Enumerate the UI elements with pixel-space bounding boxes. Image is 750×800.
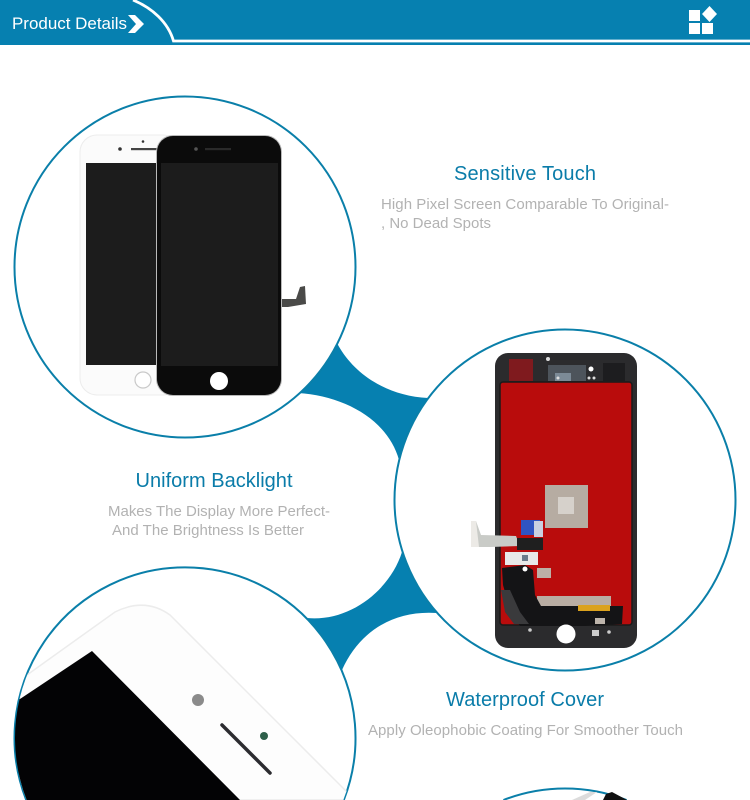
text block: Uniform Backlight	[108, 470, 330, 539]
home button	[556, 624, 576, 644]
yellow tape	[578, 605, 610, 611]
text block: Uniform Backlight: Uniform Backlight	[136, 470, 293, 492]
panel: red back of display circle	[394, 330, 736, 670]
silver sticker	[545, 485, 588, 528]
text block: Sensitive Touch: Sensitive Touch	[454, 163, 596, 185]
icon: grid squares	[689, 6, 717, 34]
sensor	[260, 732, 268, 740]
text block: Uniform Backlight: Makes The Display More Perfect-	[108, 503, 330, 520]
white phone	[80, 134, 168, 396]
text block: Sensitive Touch	[381, 163, 669, 232]
white phone body	[20, 605, 355, 800]
white label	[505, 552, 538, 565]
text block: Waterproof Cover: Waterproof Cover	[446, 689, 604, 711]
black phone	[156, 135, 282, 396]
connector: lower blue shape	[307, 552, 437, 670]
connector: upper blue shape	[298, 343, 428, 460]
text block: Sensitive Touch: , No Dead Spots	[381, 215, 491, 232]
front camera	[192, 694, 204, 706]
text block: Waterproof Cover: Apply Oleophobic Coating For Smoother Touch	[368, 722, 683, 739]
header banner	[0, 0, 750, 45]
text block: Uniform Backlight: And The Brightness Is Better	[112, 522, 304, 539]
speaker slot	[222, 725, 270, 773]
header title: Product Details	[12, 14, 127, 33]
display frame	[495, 353, 637, 648]
panel: next circle, partly visible	[503, 788, 627, 800]
silver strip	[537, 596, 611, 607]
panel: white screen close-up circle	[0, 567, 356, 800]
panel: black and white screens circle	[14, 96, 356, 438]
flex cable	[281, 286, 306, 307]
grey tab	[537, 568, 551, 578]
black flex	[502, 565, 623, 626]
text block: Sensitive Touch: High Pixel Screen Comparable To Original-	[381, 196, 669, 213]
top components	[509, 357, 625, 381]
blue tab	[521, 520, 540, 535]
black screen	[0, 651, 240, 800]
ribbon	[476, 521, 517, 547]
text block: Waterproof Cover	[368, 689, 683, 739]
icon: chevron	[128, 15, 144, 33]
red back panel	[500, 382, 632, 625]
